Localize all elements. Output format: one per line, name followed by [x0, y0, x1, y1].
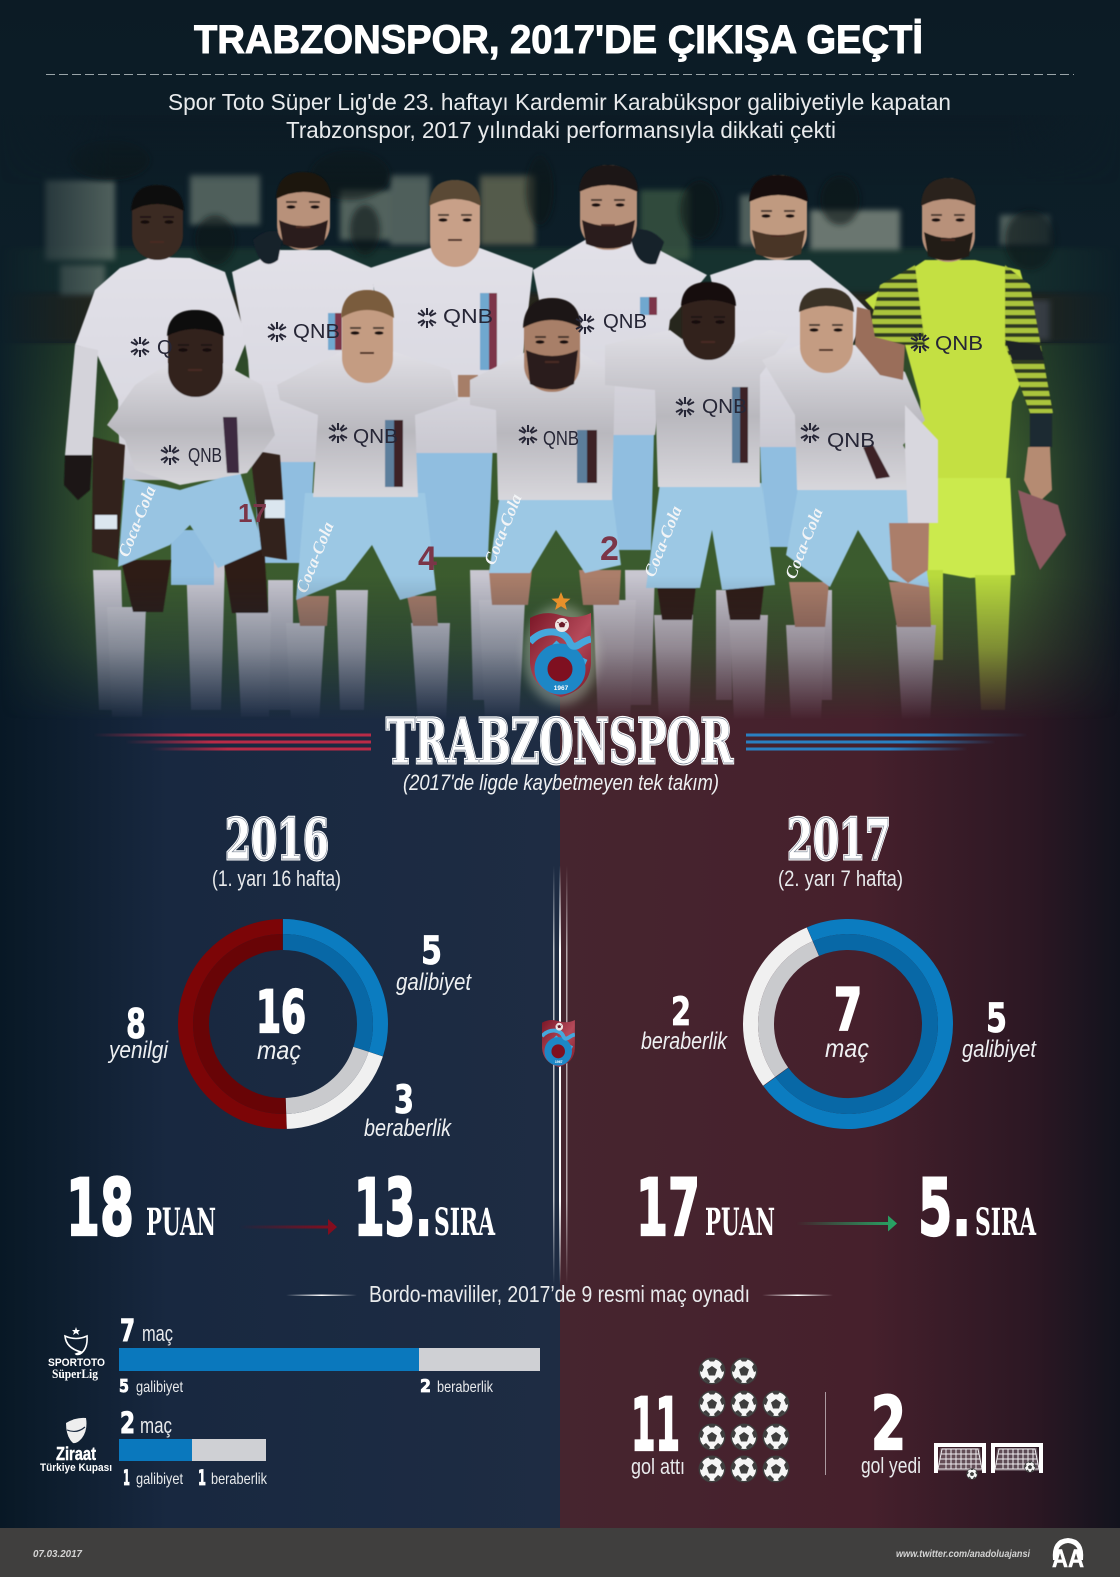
year 2017: 2017 [787, 807, 891, 873]
icon: AA logo: AA [1052, 1545, 1084, 1573]
sponsor lettering: QNB [935, 333, 983, 355]
label: wins: 5 [986, 996, 1007, 1042]
label: losses: 8 [126, 1000, 146, 1048]
shorts lettering: Coca-Cola [114, 483, 160, 559]
points and rank: 17 [636, 1164, 700, 1254]
sponsor lettering: QNB [443, 306, 493, 328]
panel: 2017 [636, 807, 1037, 1254]
points and rank: SIRA [434, 1200, 496, 1244]
bar chart: cup: maç [140, 1413, 172, 1438]
bar chart: league: 5 [119, 1376, 129, 1397]
label: wins: galibiyet [396, 969, 472, 996]
intro text: Spor Toto Süper Lig'de 23. haftayı Kardemir Karabükspor galibiyetiyle kapatan [168, 89, 951, 115]
bar chart: cup: galibiyet [136, 1471, 183, 1488]
donut center label: 16 [256, 978, 306, 1046]
points and rank [66, 1164, 496, 1254]
team photo [16, 160, 1104, 714]
sponsor lettering: QNB [702, 396, 747, 418]
goals scored: gol attı [631, 1454, 685, 1479]
year 2016: 2016 [225, 807, 329, 873]
slab wordmark: TRABZONSPOR [386, 705, 733, 778]
sponsor lettering: QNB [603, 311, 647, 333]
shorts lettering [114, 483, 827, 595]
icon: Ziraat Türkiye Kupası logo [40, 1418, 112, 1474]
dashed divider under title [46, 74, 1074, 76]
bar chart: league: beraberlik [437, 1379, 494, 1396]
label: draws [364, 1078, 453, 1142]
points and rank: 5. [918, 1164, 971, 1254]
intro text [168, 89, 951, 143]
bar chart: cup: 2 [120, 1406, 135, 1440]
bar chart: cup: 1 [123, 1466, 130, 1490]
points and rank [636, 1164, 1037, 1254]
shorts lettering: Coca-Cola [640, 503, 686, 579]
label: draws: 3 [394, 1078, 414, 1123]
label: wins: 5 [421, 929, 442, 974]
points and rank: SIRA [975, 1200, 1037, 1244]
background: navy left half [0, 0, 560, 1577]
shorts lettering: Coca-Cola [292, 519, 338, 595]
slab wordmark: TRABZONSPOR [386, 705, 733, 778]
bar chart: cup [119, 1406, 268, 1490]
icon: Ziraat Türkiye Kupası logo: Ziraat [56, 1444, 96, 1464]
bar chart: cup: beraberlik [211, 1471, 268, 1488]
goals scored [631, 1358, 790, 1482]
blue stripes [746, 734, 1028, 750]
label: losses: yenilgi [107, 1037, 169, 1064]
goals conceded: gol yedi [861, 1453, 921, 1478]
donut center label [825, 976, 869, 1063]
label: draws: beraberlik [364, 1115, 453, 1142]
front row players [92, 282, 938, 723]
icon: goals [936, 1445, 1041, 1480]
bar chart: league: 2 [420, 1376, 431, 1397]
donut center label: maç [825, 1033, 869, 1063]
goals scored: 11 [631, 1383, 680, 1468]
bar chart: league: 7 [120, 1314, 135, 1349]
icon: Ziraat Türkiye Kupası logo: Türkiye Kupası [40, 1462, 112, 1474]
icon: Trabzonspor crest with star [523, 592, 599, 705]
shorts lettering: 2 [600, 530, 619, 568]
label: draws: 2 [671, 990, 691, 1035]
label: losses [107, 1000, 169, 1064]
period label: (1. yarı 16 hafta) [212, 866, 341, 891]
sponsor lettering: QNB [188, 445, 222, 467]
icon: Spor Toto Süper Lig logo [48, 1327, 105, 1381]
subheading: (2017'de ligde kaybetmeyen tek takım) [403, 770, 719, 795]
bar chart: league [119, 1314, 540, 1397]
icon: footballs [698, 1358, 790, 1482]
label: wins: galibiyet [962, 1036, 1037, 1063]
donut center label [256, 978, 306, 1065]
sponsor lettering: QNB [293, 321, 340, 343]
footer [0, 1528, 1120, 1577]
arrow: up [796, 1216, 897, 1232]
footer: www.twitter.com/anadoluajansi [896, 1548, 1031, 1560]
shorts lettering: 4 [418, 540, 437, 578]
bar chart: cup: 1 [198, 1466, 206, 1490]
icon: small crest [542, 1020, 575, 1067]
points and rank: PUAN [705, 1200, 775, 1244]
label: wins [962, 996, 1037, 1063]
sponsor lettering: QNB [827, 430, 875, 452]
label: draws [641, 990, 729, 1055]
year 2016 [225, 807, 329, 873]
points and rank: 18 [66, 1164, 134, 1254]
section heading: Bordo-mavililer, 2017’de 9 resmi maç oynadı [369, 1281, 750, 1307]
arrow: down [239, 1219, 337, 1235]
donut center label: 7 [834, 976, 862, 1044]
label: wins [396, 929, 472, 996]
background: maroon right half [560, 0, 1120, 1577]
background: dark teal top wash [0, 0, 1120, 720]
center divider [553, 865, 568, 1285]
bar chart: league: galibiyet [136, 1379, 183, 1396]
points and rank: 13. [354, 1164, 432, 1254]
sponsor lettering: QNB [353, 426, 398, 448]
icon: Spor Toto Süper Lig logo: SüperLig [52, 1366, 98, 1381]
shorts lettering: 17 [238, 498, 267, 528]
icon: Spor Toto Süper Lig logo: SPORTOTO [48, 1357, 105, 1369]
shorts lettering: Coca-Cola [480, 491, 526, 567]
sponsor lettering [131, 306, 983, 467]
donut center label: maç [257, 1035, 301, 1065]
shorts lettering: Coca-Cola [781, 505, 827, 581]
year 2016: 2016 [225, 807, 329, 873]
red stripes [93, 734, 371, 750]
donut chart 16 matches [160, 901, 406, 1147]
donut chart 7 matches [712, 888, 984, 1160]
title: TRABZONSPOR, 2017'DE ÇIKIŞA GEÇTİ [194, 18, 923, 62]
footer: 07.03.2017 [33, 1548, 83, 1560]
sponsor lettering: Q [157, 337, 173, 359]
period label: (2. yarı 7 hafta) [778, 866, 903, 891]
bar chart: league: maç [142, 1321, 173, 1346]
label: draws: beraberlik [641, 1028, 729, 1055]
goals conceded [861, 1382, 1041, 1480]
points and rank: PUAN [146, 1200, 216, 1244]
year 2017: 2017 [787, 807, 891, 873]
sponsor lettering: QNB [543, 428, 579, 450]
panel: 2016 [66, 807, 496, 1254]
year 2017 [787, 807, 891, 873]
stadium and pitch [16, 160, 1104, 706]
intro text: Trabzonspor, 2017 yılındaki performansıyla dikkati çekti [286, 117, 836, 143]
slab wordmark [386, 705, 733, 778]
heading: TRABZONSPOR with stripes [93, 705, 1028, 778]
goals conceded: 2 [871, 1382, 906, 1467]
back row players [64, 165, 1066, 710]
